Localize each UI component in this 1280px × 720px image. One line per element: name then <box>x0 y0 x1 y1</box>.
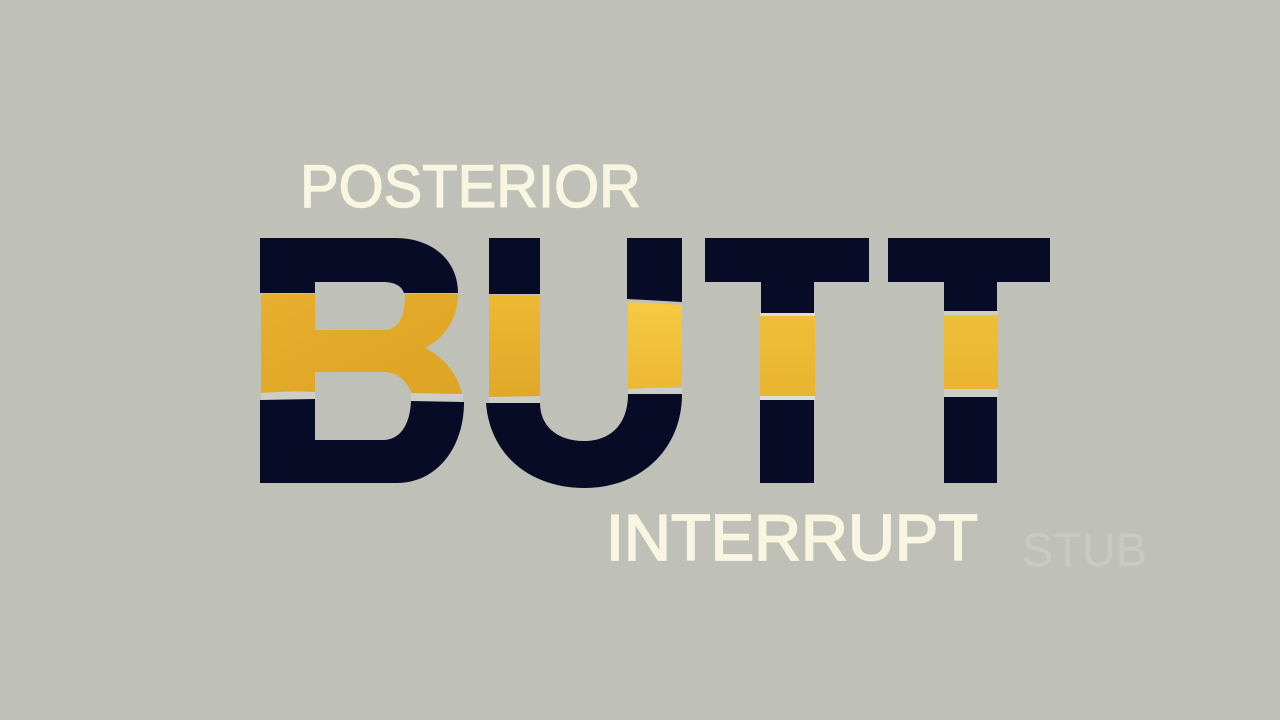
heading: POSTERIOR: POSTERIOR <box>300 153 641 220</box>
letter T (second) <box>888 238 1050 483</box>
letter T (first) <box>705 238 869 483</box>
letter B <box>260 238 464 483</box>
label: INTERRUPT: INTERRUPT <box>606 501 978 574</box>
wordmark: BUTT <box>260 238 1050 488</box>
label: STUB: STUB <box>1022 523 1147 576</box>
letter U <box>486 238 682 488</box>
